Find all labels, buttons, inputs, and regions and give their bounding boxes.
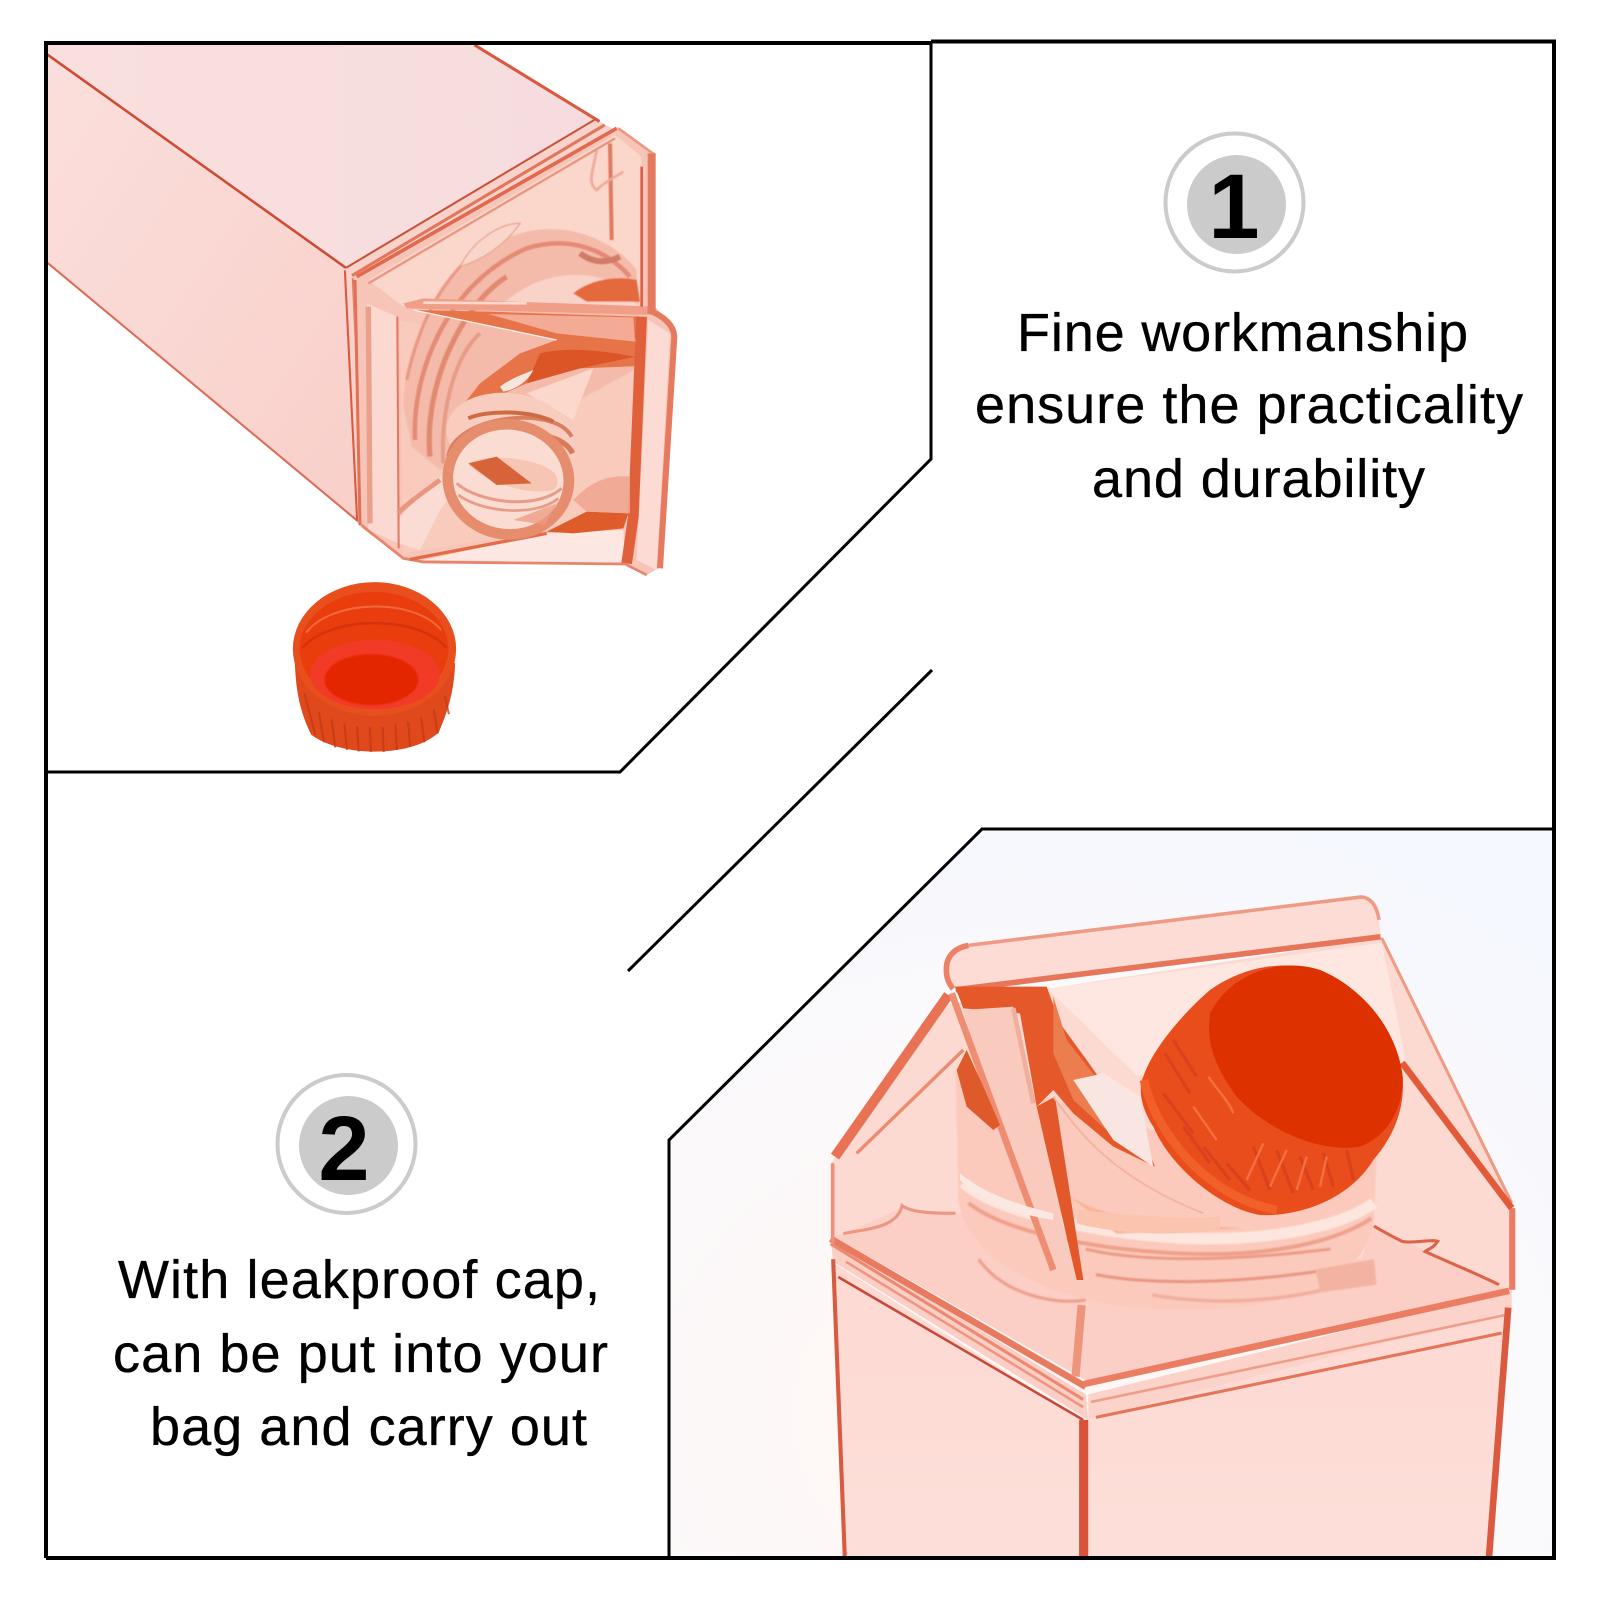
text block 1: ensure the practicality xyxy=(975,375,1523,435)
panel: bottle lying on its side with cap removed xyxy=(47,45,675,752)
cap ribs xyxy=(305,694,449,752)
flap xyxy=(946,896,1381,989)
wavy reflections on shoulder xyxy=(843,1206,956,1234)
folded gable left side xyxy=(835,987,1220,1280)
number badge 2 xyxy=(278,1075,416,1213)
cap top disc xyxy=(1209,965,1403,1148)
text block 2 xyxy=(113,1250,608,1457)
number badge 2: 2 xyxy=(318,1098,370,1200)
text block 1 xyxy=(975,303,1523,509)
loose orange cap xyxy=(293,582,456,752)
text block 1: and durability xyxy=(1092,449,1425,509)
text block 2: bag and carry out xyxy=(150,1397,587,1457)
carton gable and body xyxy=(831,896,1514,1560)
neck cylinder xyxy=(956,1070,1377,1310)
text block 1: Fine workmanship xyxy=(1017,303,1468,363)
pale panel background xyxy=(782,830,1552,1546)
frame edges of end face xyxy=(357,128,617,277)
panel: bottle close-up with cap on xyxy=(782,830,1552,1556)
orange folds in gable xyxy=(403,298,655,420)
text block 2: With leakproof cap, xyxy=(118,1250,600,1310)
feature 2: leakproof cap xyxy=(113,1075,608,1457)
number badge 1: 1 xyxy=(1208,156,1260,258)
text block 2: can be put into your xyxy=(113,1324,608,1384)
number badge 1 xyxy=(1166,134,1304,272)
cap ribs xyxy=(1163,1040,1353,1193)
neck shoulder xyxy=(403,143,640,470)
feature 1: fine workmanship xyxy=(975,134,1523,509)
bottle body, side view xyxy=(47,45,620,531)
carton edges xyxy=(833,1259,845,1560)
orange screw cap on bottle xyxy=(1141,965,1403,1215)
bottle end face with gable xyxy=(353,127,675,575)
threaded neck opening xyxy=(442,392,575,540)
